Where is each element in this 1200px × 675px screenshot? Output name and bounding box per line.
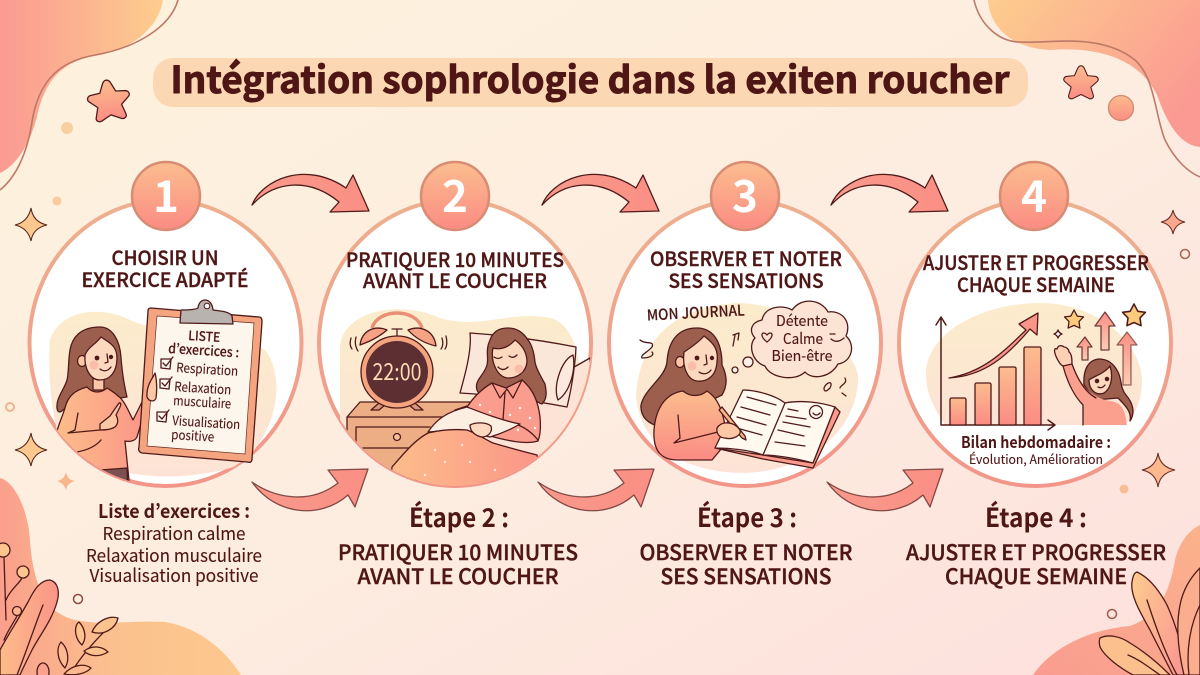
step 1 heading: EXERCICE ADAPTÉ bbox=[82, 264, 248, 293]
open journal bbox=[715, 390, 840, 468]
corner blob: bottom right bbox=[1033, 525, 1200, 675]
corner blob: top right bbox=[974, 0, 1200, 177]
checklist text: positive bbox=[171, 424, 215, 446]
checklist text bbox=[168, 325, 241, 446]
arrow: step 3 to 4, top bbox=[831, 174, 948, 212]
panel: step 1 bbox=[30, 161, 302, 490]
woman cheering bbox=[1055, 346, 1133, 425]
corner blob: top left bbox=[0, 0, 178, 190]
caption: step 1: Visualisation positive bbox=[90, 562, 259, 588]
step 1 badge bbox=[132, 162, 200, 230]
caption: step 4: Étape 4 : bbox=[985, 498, 1087, 535]
step 2 heading: PRATIQUER 10 MINUTES bbox=[346, 244, 564, 273]
weekly review caption: Bilan hebdomadaire : bbox=[961, 429, 1111, 453]
illustration: woman writing in journal bbox=[636, 303, 858, 473]
doodles bbox=[640, 333, 846, 396]
caption: step 1 bbox=[86, 497, 262, 588]
caption: step 1: Relaxation musculaire bbox=[86, 542, 262, 568]
checklist text: Relaxation bbox=[174, 376, 232, 398]
caption: step 4 bbox=[906, 498, 1166, 591]
bar chart bbox=[936, 313, 1055, 430]
rising arrows and stars bbox=[1054, 304, 1145, 385]
sparkles and dots left bbox=[6, 196, 82, 604]
hair bbox=[476, 328, 546, 404]
caption: step 1: Liste d’exercices : bbox=[98, 497, 250, 524]
caption: step 2: PRATIQUER 10 MINUTES bbox=[338, 537, 578, 567]
decorative star: top left bbox=[85, 77, 133, 123]
caption: step 4: AJUSTER ET PROGRESSER bbox=[906, 537, 1166, 567]
step 1 number: 1 bbox=[153, 161, 179, 225]
illustration: sleeping woman and clock bbox=[340, 309, 600, 490]
alarm clock bbox=[350, 313, 447, 410]
illustration blob bbox=[926, 303, 1142, 425]
step 1 heading: CHOISIR UN bbox=[112, 242, 218, 271]
step 3 badge bbox=[711, 162, 779, 230]
arrow: step 3 to 4, bottom bbox=[827, 469, 943, 511]
arrow: step 1 to 2, bottom bbox=[252, 469, 368, 511]
arrow: step 1 to 2, top bbox=[252, 174, 369, 212]
nightstand bbox=[347, 402, 470, 480]
step 3 heading: SES SENSATIONS bbox=[668, 265, 824, 294]
title: Intégration sophrologie dans la exiten roucher bbox=[170, 50, 1010, 104]
thought cloud bbox=[732, 301, 852, 378]
illustration: woman with checklist bbox=[49, 312, 276, 490]
bed and pillow bbox=[455, 358, 600, 480]
step 2 heading: AVANT LE COUCHER bbox=[363, 265, 547, 294]
caption: step 1: Respiration calme bbox=[102, 520, 246, 546]
checklist text: Respiration bbox=[176, 357, 239, 380]
arrow: step 2 to 3, top bbox=[542, 174, 659, 212]
title pill bbox=[153, 58, 1028, 107]
pajamas bbox=[467, 380, 540, 442]
clock time: 22:00 bbox=[372, 353, 422, 387]
arrow: step 2 to 3, bottom bbox=[538, 469, 654, 511]
step 2 number: 2 bbox=[442, 161, 468, 225]
step 4 badge bbox=[1000, 162, 1068, 230]
thought cloud: Bien-être bbox=[772, 345, 832, 366]
thought cloud: Calme bbox=[783, 328, 823, 349]
step 2 badge bbox=[421, 162, 489, 230]
corner blob: bottom left bbox=[0, 478, 241, 675]
sheet and blanket bbox=[428, 407, 520, 437]
plant: bottom right bbox=[1099, 568, 1200, 675]
caption: step 3: Étape 3 : bbox=[697, 498, 797, 535]
decorative dot bbox=[61, 122, 73, 134]
step 3 heading: OBSERVER ET NOTER bbox=[650, 243, 842, 272]
caption: step 3: SES SENSATIONS bbox=[660, 561, 832, 591]
journal label: MON JOURNAL bbox=[646, 299, 745, 326]
panel: step 4 bbox=[899, 161, 1171, 486]
caption: step 4: CHAQUE SEMAINE bbox=[945, 561, 1127, 591]
step 3 number: 3 bbox=[732, 161, 758, 225]
decorative circle bbox=[1108, 96, 1134, 120]
checklist text: LISTE bbox=[188, 325, 221, 346]
panel: step 3 bbox=[609, 161, 881, 486]
checklist text: d’exercices : bbox=[168, 337, 240, 361]
caption: step 3: OBSERVER ET NOTER bbox=[640, 537, 853, 567]
step 4 heading: CHAQUE SEMAINE bbox=[957, 269, 1115, 298]
sparkles and dots right bbox=[1108, 210, 1190, 618]
step 4 number: 4 bbox=[1021, 161, 1047, 225]
cloud text: Détente bbox=[776, 310, 828, 331]
checklist text: musculaire bbox=[173, 390, 232, 413]
caption: step 2: Étape 2 : bbox=[409, 498, 509, 535]
step 4 heading: AJUSTER ET PROGRESSER bbox=[923, 247, 1149, 276]
checklist text: Visualisation bbox=[172, 410, 241, 433]
plant: bottom left bbox=[0, 543, 118, 675]
weekly review detail: Évolution, Amélioration bbox=[969, 449, 1103, 468]
clipboard checklist bbox=[139, 300, 262, 462]
caption: step 2: AVANT LE COUCHER bbox=[358, 561, 559, 591]
panel: step 2 bbox=[319, 161, 600, 490]
caption: step 2 bbox=[338, 498, 578, 591]
caption: step 3 bbox=[640, 498, 853, 591]
decorative star: top right bbox=[1064, 66, 1098, 99]
